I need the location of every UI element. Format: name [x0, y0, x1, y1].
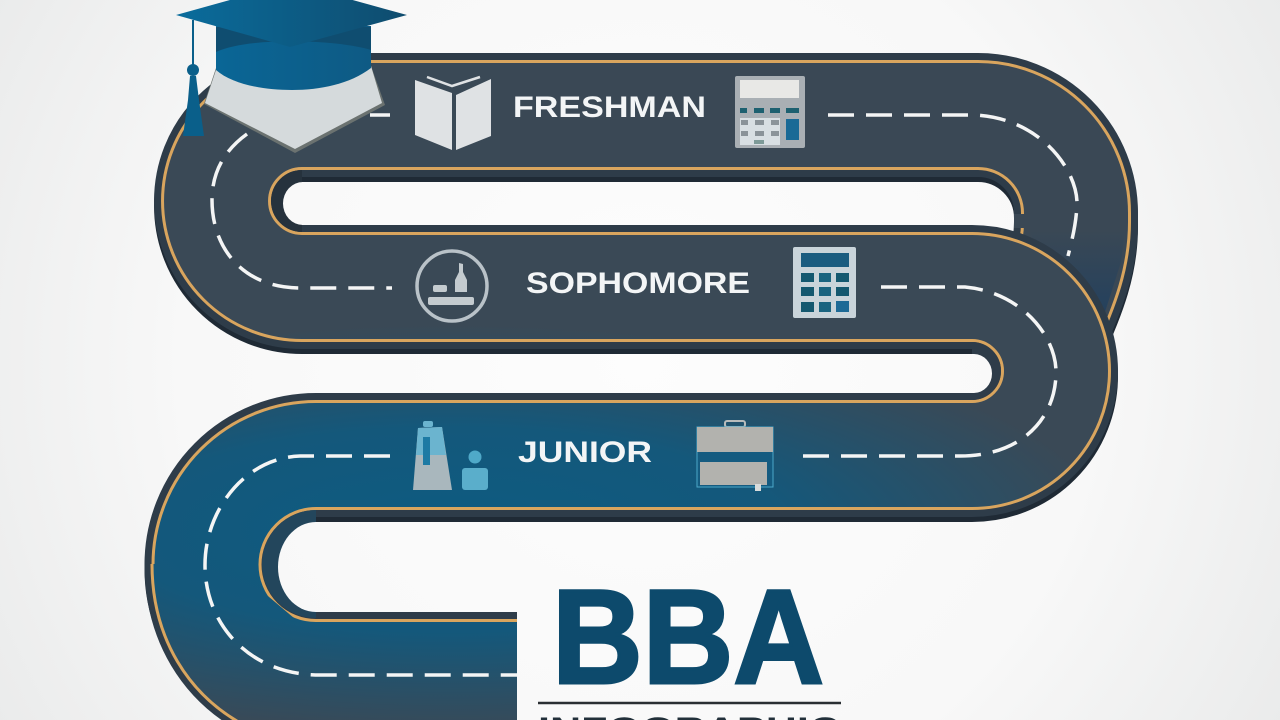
title: BBA: BBA: [552, 563, 824, 712]
road: sophomore and junior sections with hairpins: [206, 115, 1056, 679]
label: sophomore: SOPHOMORE: [526, 267, 750, 300]
title rule: [538, 702, 841, 704]
icon: graduation cap: [176, 0, 407, 153]
label: junior: JUNIOR: [518, 436, 652, 469]
road: inner hairpin ends: [262, 170, 1001, 618]
centre line dashes: [205, 115, 1077, 675]
label: freshman: FRESHMAN: [513, 91, 706, 124]
icon: blue calculator: [793, 247, 856, 318]
road: freshman section with top right bend: [300, 115, 1125, 335]
icon: microscope in ring: [417, 251, 487, 321]
icon: metronome and figure: [413, 421, 488, 490]
icon: grey calculator: [735, 76, 805, 148]
icon: open book: [415, 77, 491, 150]
tassel: [183, 20, 204, 136]
icon: briefcase: [697, 421, 773, 491]
road: lower left outer bend: [152, 564, 517, 720]
